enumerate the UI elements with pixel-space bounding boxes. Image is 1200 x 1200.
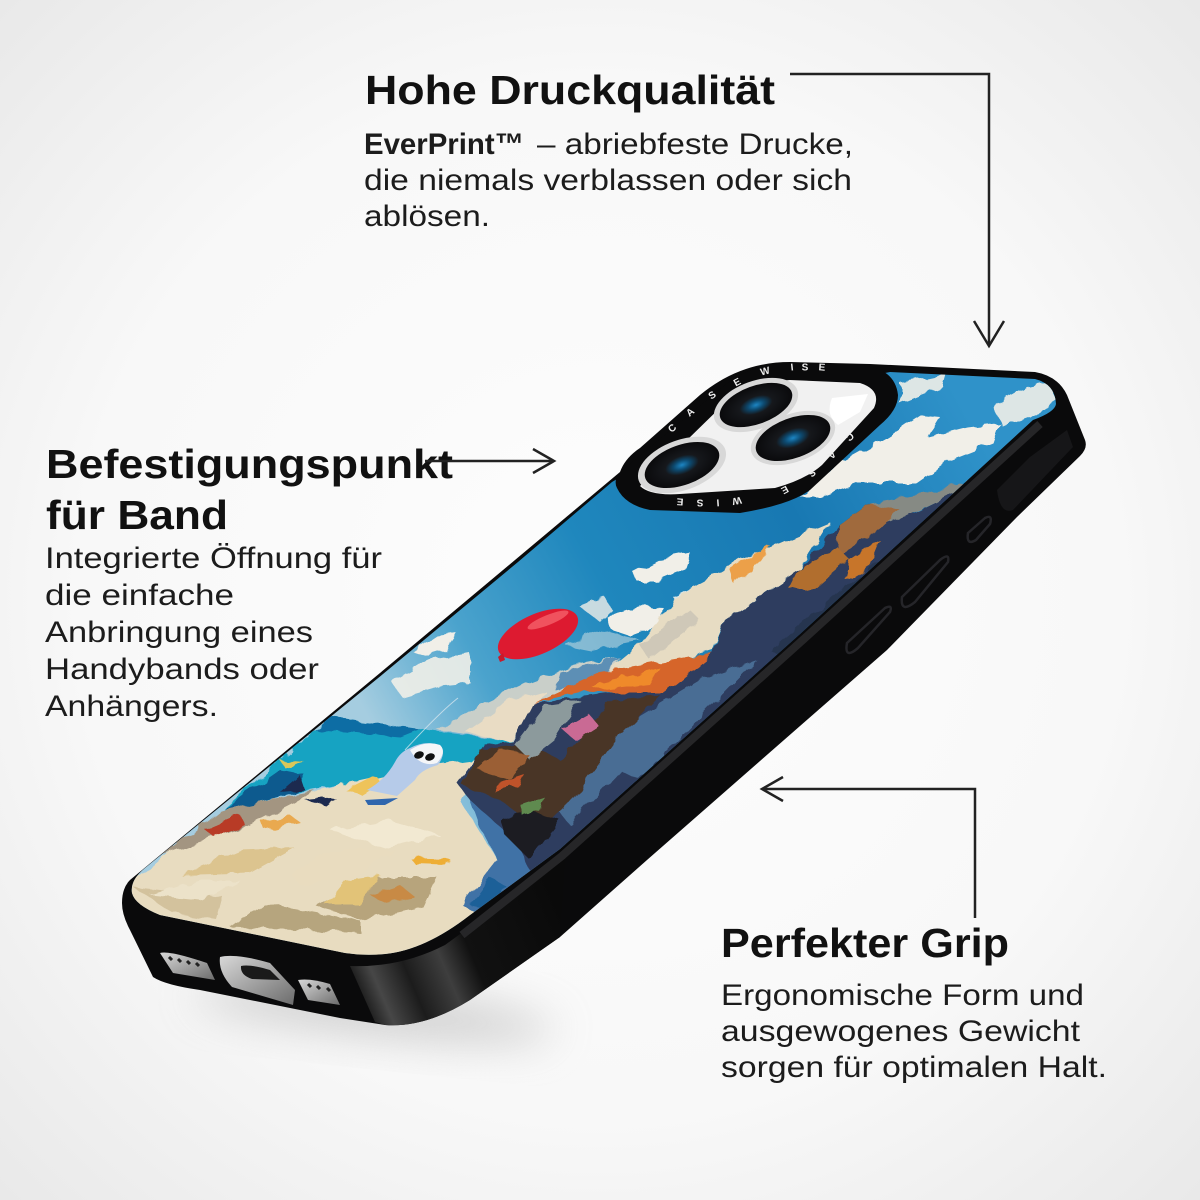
callout: grip — [721, 920, 1107, 1084]
flowers — [563, 715, 598, 740]
body text — [721, 979, 1107, 1084]
heading: Perfekter Grip — [721, 920, 1009, 966]
distant hills — [437, 657, 620, 742]
body text: – abriebfeste Drucke, — [537, 128, 853, 161]
body text — [45, 542, 382, 723]
dark boulders — [500, 810, 560, 860]
volume down — [846, 607, 891, 653]
heading — [46, 441, 453, 538]
brown timber and terraces — [462, 695, 660, 830]
body text: Handybands oder — [45, 653, 319, 686]
brand lettering on upper ring: A — [684, 406, 697, 419]
body text: Integrierte Öffnung für — [45, 542, 382, 575]
callout: strap attachment — [45, 441, 453, 723]
action button — [968, 517, 991, 542]
flash highlight — [830, 394, 868, 425]
red balloon — [405, 598, 585, 750]
brand lettering on upper ring: W — [759, 365, 772, 378]
brand lettering on upper ring — [666, 362, 826, 435]
lens right — [743, 400, 843, 476]
brand lettering on lower ring: I — [716, 496, 720, 508]
clouds — [393, 373, 1056, 697]
body text: die einfache — [45, 579, 234, 612]
arrow: print quality — [790, 74, 1004, 346]
brand lettering on lower ring: S — [696, 496, 703, 508]
brand lettering on upper ring: E — [732, 376, 743, 389]
body text: Anbringung eines — [45, 616, 313, 649]
orange roof — [533, 653, 713, 703]
camera surround — [616, 362, 898, 513]
painted back artwork — [132, 372, 1056, 955]
ghost figure — [365, 743, 443, 805]
brand lettering on lower ring: C — [843, 430, 856, 443]
brand lettering on upper ring: I — [790, 362, 794, 374]
side buttons and strap opening — [846, 430, 1073, 653]
phone case — [105, 360, 1086, 1025]
brand lettering on upper ring: S — [802, 362, 809, 374]
body text: ausgewogenes Gewicht — [721, 1015, 1081, 1048]
beach — [105, 758, 497, 985]
body text: die niemals verblassen oder sich — [364, 164, 852, 197]
arrow: grip — [762, 777, 975, 918]
body text: Ergonomische Form und — [721, 979, 1084, 1012]
brand lettering on lower ring: S — [805, 466, 817, 479]
slate blue wash — [550, 660, 757, 825]
volume up — [902, 556, 948, 607]
lens top — [706, 367, 806, 443]
sand paint patches — [180, 848, 295, 875]
camera bay — [640, 380, 876, 494]
heading: Befestigungspunkt — [46, 441, 453, 487]
body text: sorgen für optimalen Halt. — [721, 1051, 1107, 1084]
sea — [220, 717, 513, 812]
brand lettering on upper ring: E — [818, 362, 826, 374]
phone drop shadow — [194, 971, 556, 1053]
bottom right speaker grille — [298, 980, 340, 1005]
heading: Hohe Druckqualität — [365, 67, 775, 113]
sky — [120, 360, 1080, 960]
heading: für Band — [46, 492, 228, 538]
shore shadow — [462, 800, 560, 925]
body text: ablösen. — [364, 200, 490, 233]
brand lettering on upper ring: S — [707, 389, 719, 402]
white village facades — [597, 522, 830, 680]
body text — [364, 128, 853, 233]
brand lettering on lower ring: W — [731, 494, 742, 506]
lens left — [630, 426, 734, 504]
side rim highlight — [462, 424, 1040, 935]
charging port — [220, 956, 295, 1005]
top village ridge — [870, 480, 968, 522]
callout: print quality — [364, 67, 853, 233]
rocks — [163, 790, 315, 855]
brand lettering on lower ring: E — [676, 495, 684, 507]
glossy lower corner of case — [350, 858, 565, 1025]
body text: Anhängers. — [45, 690, 218, 723]
brand lettering on lower ring — [676, 430, 856, 508]
village dark band — [456, 493, 953, 871]
arrow: strap attachment — [425, 449, 554, 473]
brand lettering on upper ring: C — [666, 422, 679, 435]
strap recess — [997, 430, 1073, 511]
bottom left speaker grille — [160, 952, 215, 980]
case body — [122, 362, 1086, 1025]
body text: EverPrint™ — [364, 128, 524, 161]
brand lettering on lower ring: E — [779, 483, 790, 496]
brand lettering on lower ring: A — [825, 448, 838, 461]
